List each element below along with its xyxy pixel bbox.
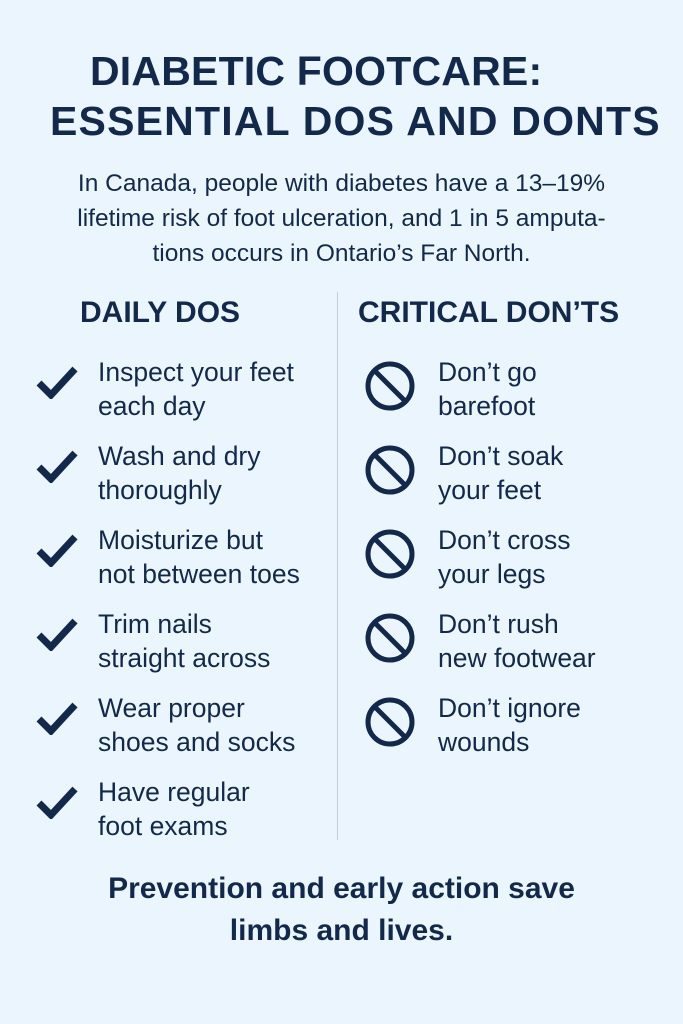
do 5 <box>36 693 295 757</box>
do 2: Wash and dry <box>98 441 261 471</box>
do 1: Inspect your feet <box>98 357 294 387</box>
dont 3: Don’t cross <box>438 525 571 555</box>
subtitle: lifetime risk of foot ulceration, and 1 in 5 amputa- <box>77 205 606 232</box>
dont 4: Don’t rush <box>438 609 559 639</box>
do 2 <box>36 441 261 505</box>
do 4: straight across <box>98 643 270 673</box>
list: dos <box>36 357 300 841</box>
do 3: Moisturize but <box>98 525 263 555</box>
dont 5: Don’t ignore <box>438 693 581 723</box>
footer message: Prevention and early action save <box>108 872 575 905</box>
dont 5: wounds <box>438 727 529 757</box>
footer message <box>108 872 575 947</box>
do 6: Have regular <box>98 777 250 807</box>
dont 1: barefoot <box>438 391 535 421</box>
do 1: each day <box>98 391 206 421</box>
dont 3 <box>366 525 571 589</box>
dont 5 <box>366 693 581 757</box>
do 2: thoroughly <box>98 475 222 505</box>
dont 2 <box>366 441 564 505</box>
dont 3: your legs <box>438 559 546 589</box>
list: donts <box>366 357 596 757</box>
do 6 <box>36 777 250 841</box>
subtitle <box>77 170 606 267</box>
dont 1: Don’t go <box>438 357 537 387</box>
footer message: limbs and lives. <box>230 914 453 947</box>
title: DIABETIC FOOTCARE: <box>90 48 542 94</box>
do 4 <box>36 609 270 673</box>
heading: daily dos: DAILY DOS <box>80 296 240 329</box>
dont 4: new footwear <box>438 643 596 673</box>
dont 1 <box>366 357 537 421</box>
dont 4 <box>366 609 596 673</box>
do 5: shoes and socks <box>98 727 295 757</box>
do 5: Wear proper <box>98 693 245 723</box>
dont 2: your feet <box>438 475 541 505</box>
do 4: Trim nails <box>98 609 212 639</box>
dont 2: Don’t soak <box>438 441 563 471</box>
do 1 <box>36 357 294 421</box>
title line 2: ESSENTIAL DOS AND DONTS <box>50 98 661 144</box>
do 3 <box>36 525 300 589</box>
heading: critical donts: CRITICAL DON’TS <box>358 296 619 329</box>
subtitle: tions occurs in Ontario’s Far North. <box>152 240 531 267</box>
subtitle: In Canada, people with diabetes have a 13–19% <box>78 170 605 197</box>
do 6: foot exams <box>98 811 228 841</box>
do 3: not between toes <box>98 559 300 589</box>
